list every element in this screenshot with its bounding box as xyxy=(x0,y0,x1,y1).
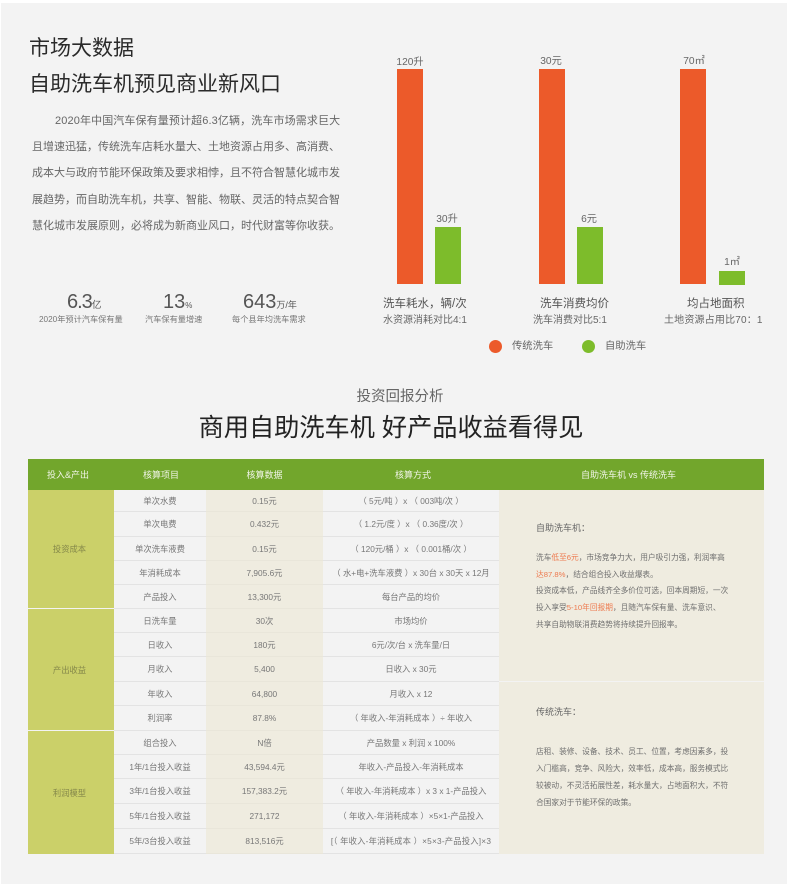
row: 年收入: 年收入 xyxy=(148,689,172,699)
row: 1年/1台投入收益: 年收入-产品投入-年消耗成本 xyxy=(358,762,464,772)
table header: 自助洗车机 vs 传统洗车 xyxy=(581,470,676,480)
legend dot: traditional xyxy=(489,340,502,353)
row: 1年/1台投入收益 xyxy=(114,755,499,779)
row: 日收入 xyxy=(114,633,499,657)
row: 单次水费: （ 5元/吨 ）x （ 003吨/次 ） xyxy=(358,496,464,506)
row: 年消耗成本: （ 水+电+洗车液费 ）x 30台 x 30天 x 12月 xyxy=(332,568,490,578)
row: 单次电费: 0.432元 xyxy=(250,519,279,529)
row: 日洗车量: 市场均价 xyxy=(394,616,428,626)
row: 3年/1台投入收益: 157,383.2元 xyxy=(242,786,287,796)
label: 30元: 30元 xyxy=(540,56,562,67)
comparison text: self-service: 洗车低至6元，市场竞争力大，用户吸引力强，利润率高 xyxy=(536,553,725,562)
comparison text: self-service xyxy=(536,553,728,629)
stats row xyxy=(39,291,306,324)
table header xyxy=(28,459,764,490)
comparison text: self-service: 共享自助物联消费趋势将持续提升回报率。 xyxy=(536,620,682,629)
row: 月收入: 日收入 x 30元 xyxy=(385,664,437,674)
section heading: 商用自助洗车机 好产品收益看得见 xyxy=(199,414,583,442)
comparison text: traditional xyxy=(536,747,728,807)
comparison heading: self-service: 自助洗车机： xyxy=(536,523,590,533)
row: 5年/3台投入收益 xyxy=(114,829,499,854)
row: 单次水费 xyxy=(114,490,499,512)
label: 30升: 30升 xyxy=(436,214,458,225)
row: 5年/1台投入收益 xyxy=(114,804,499,829)
row: 单次洗车液费: （ 120元/桶 ）x （ 0.001桶/次 ） xyxy=(350,544,472,554)
row: 组合投入: N倍 xyxy=(257,738,272,748)
row: 5年/1台投入收益: （ 年收入-年消耗成本 ）×5×1-产品投入 xyxy=(338,811,484,821)
row: 组合投入: 产品数量 x 利润 x 100% xyxy=(367,738,455,748)
row: 日洗车量: 30次 xyxy=(256,616,273,626)
caption: spend: 洗车消费均价 xyxy=(540,298,609,310)
stat: 643万/年: 643万/年 xyxy=(243,291,297,313)
caption: water ratio: 水资源消耗对比4:1 xyxy=(383,315,467,326)
row: 5年/1台投入收益: 271,172 xyxy=(250,811,280,821)
row: 利润率: 87.8% xyxy=(253,713,276,723)
row: 年收入: 64,800 xyxy=(252,689,277,699)
comparison text: traditional: 较被动，不灵活拓展性差，耗水量大，占地面积大，不符 xyxy=(536,781,728,790)
row: 产品投入: 13,300元 xyxy=(248,592,281,602)
comparison text: traditional: 合国家对于节能环保的政策。 xyxy=(536,798,636,807)
row: 年收入: 月收入 x 12 xyxy=(390,689,432,699)
row: 单次水费: 单次水费 xyxy=(143,496,177,506)
group: 投资成本 xyxy=(28,490,114,608)
row: 年消耗成本: 7,905.6元 xyxy=(246,568,282,578)
row: 单次洗车液费 xyxy=(114,537,499,561)
row: 利润率: 利润率 xyxy=(148,713,172,723)
row: 5年/3台投入收益: 813,516元 xyxy=(245,836,284,846)
legend label: self-service: 自助洗车 xyxy=(605,341,646,352)
table header: 核算数据 xyxy=(246,470,282,480)
bar chart: water use xyxy=(383,56,467,326)
label: 1㎡: 1㎡ xyxy=(724,257,740,268)
stat: 13% xyxy=(145,291,202,324)
text block: market introduction: 2020年中国汽车保有量预计超6.3亿辆，洗车市场需求巨大 xyxy=(55,115,340,127)
group: 利润模型: 利润模型 xyxy=(53,788,86,798)
text block: market introduction: 成本大与政府节能环保政策及要求相悖，且不符合智慧化城市发 xyxy=(32,167,340,179)
row: 年消耗成本: 年消耗成本 xyxy=(139,568,181,578)
row: 5年/3台投入收益: [（ 年收入-年消耗成本 ）×5×3-产品投入]×3 xyxy=(331,836,491,846)
row: 单次电费: 单次电费 xyxy=(143,519,177,529)
row: 月收入: 月收入 xyxy=(148,664,172,674)
comparison panel: traditional xyxy=(499,682,764,854)
stat: 643万/年: 每个县年均洗车需求 xyxy=(232,315,306,324)
row: 年收入 xyxy=(114,682,499,706)
group: 产出收益: 产出收益 xyxy=(53,664,86,674)
legend label: traditional: 传统洗车 xyxy=(512,341,553,352)
bar: self-service 6元 xyxy=(577,227,603,284)
group: 投资成本: 投资成本 xyxy=(53,544,86,554)
caption: water use: 洗车耗水，辆/次 xyxy=(383,298,467,310)
bar chart: land area xyxy=(664,54,763,326)
label: 120升: 120升 xyxy=(396,57,424,68)
table: investment return xyxy=(28,459,764,854)
comparison text: traditional: 店租、装修、设备、技术、员工、位置，考虑因素多，投 xyxy=(536,747,728,756)
bar: self-service 1㎡ xyxy=(719,271,745,285)
row: 产品投入 xyxy=(114,585,499,609)
table header: 核算项目 xyxy=(143,470,179,480)
bar: self-service 30升 xyxy=(435,227,461,284)
comparison text: traditional: 入门槛高，竞争、风险大，效率低，成本高，服务模式比 xyxy=(536,764,728,773)
table header: 投入&产出 xyxy=(47,470,89,480)
text block: market introduction: 慧化城市发展原则，必将成为新商业风口，时代财富等你收获。 xyxy=(32,220,340,232)
row: 3年/1台投入收益 xyxy=(114,779,499,804)
row: 日收入: 日收入 xyxy=(148,640,172,650)
text block: market introduction: 且增速迅猛，传统洗车店耗水量大、土地资源占用多、高消费、 xyxy=(32,141,340,153)
row: 产品投入: 产品投入 xyxy=(143,592,177,602)
row: 月收入 xyxy=(114,657,499,682)
row: 月收入: 5,400 xyxy=(254,664,275,674)
stat: 6.3亿 xyxy=(39,291,123,324)
title: 自助洗车机预见商业新风口 xyxy=(29,73,281,96)
row: 日收入: 6元/次/台 x 洗车量/日 xyxy=(372,640,450,650)
row: 1年/1台投入收益: 43,594.4元 xyxy=(244,762,285,772)
group: 产出收益 xyxy=(28,609,114,730)
caption: land area: 均占地面积 xyxy=(687,298,744,310)
row: 1年/1台投入收益: 1年/1台投入收益 xyxy=(129,762,191,772)
row: 日收入: 180元 xyxy=(253,640,276,650)
title: 市场大数据 xyxy=(29,37,134,60)
stat: 6.3亿: 2020年预计汽车保有量 xyxy=(39,315,123,324)
legend dot: self-service xyxy=(582,340,595,353)
caption: land ratio: 土地资源占用比70：1 xyxy=(664,315,763,326)
bar: traditional 120升 xyxy=(397,69,423,284)
table header: 核算方式 xyxy=(395,470,431,480)
comparison text: self-service: 投资成本低，产品线齐全多价位可选，回本周期短，一次 xyxy=(536,586,728,595)
bar: traditional 70㎡ xyxy=(680,69,706,284)
row: 单次水费: 0.15元 xyxy=(252,496,277,506)
legend xyxy=(489,340,646,353)
row: 产品投入: 每台产品的均价 xyxy=(382,592,440,602)
row: 单次洗车液费: 单次洗车液费 xyxy=(135,544,185,554)
row: 日洗车量: 日洗车量 xyxy=(143,616,177,626)
label: 70㎡: 70㎡ xyxy=(683,56,705,67)
bar chart: spend xyxy=(533,56,609,326)
row: 3年/1台投入收益: 3年/1台投入收益 xyxy=(129,786,191,796)
row: 单次电费: （ 1.2元/度 ）x （ 0.36度/次 ） xyxy=(354,519,468,529)
row: 组合投入 xyxy=(114,731,499,755)
comparison text: self-service: 投入享受5-10年回报期，且随汽车保有量、洗车意识、 xyxy=(536,603,721,612)
stat: 13%: 汽车保有量增速 xyxy=(145,315,202,324)
stat: 6.3亿: 6.3亿 xyxy=(67,291,101,313)
comparison panel: self-service xyxy=(499,490,764,681)
section subtitle: 投资回报分析 xyxy=(356,389,444,405)
caption: spend ratio: 洗车消费对比5:1 xyxy=(533,315,607,326)
row: 利润率 xyxy=(114,706,499,731)
stat: 643万/年 xyxy=(232,291,306,324)
row: 单次洗车液费: 0.15元 xyxy=(252,544,277,554)
text block: market introduction: 展趋势，而自助洗车机，共享、智能、物联、灵活的特点契合智 xyxy=(32,194,340,206)
bar: traditional 30元 xyxy=(539,69,565,284)
comparison text: self-service: 达87.8%，结合组合投入收益爆表。 xyxy=(536,570,658,579)
row: 单次电费 xyxy=(114,512,499,537)
row: 组合投入: 组合投入 xyxy=(143,738,177,748)
group: 利润模型 xyxy=(28,731,114,854)
row: 日洗车量 xyxy=(114,609,499,633)
row: 5年/3台投入收益: 5年/3台投入收益 xyxy=(129,836,191,846)
row: 利润率: （ 年收入-年消耗成本 ）÷ 年收入 xyxy=(350,713,472,723)
comparison heading: traditional: 传统洗车： xyxy=(536,707,581,717)
row: 5年/1台投入收益: 5年/1台投入收益 xyxy=(129,811,191,821)
row: 年消耗成本 xyxy=(114,561,499,585)
label: 6元: 6元 xyxy=(581,214,597,225)
row: 3年/1台投入收益: （ 年收入-年消耗成本 ）x 3 x 1-产品投入 xyxy=(336,786,486,796)
text block: market introduction xyxy=(32,114,340,232)
title xyxy=(29,37,281,96)
stat: 13%: 13% xyxy=(163,291,192,313)
